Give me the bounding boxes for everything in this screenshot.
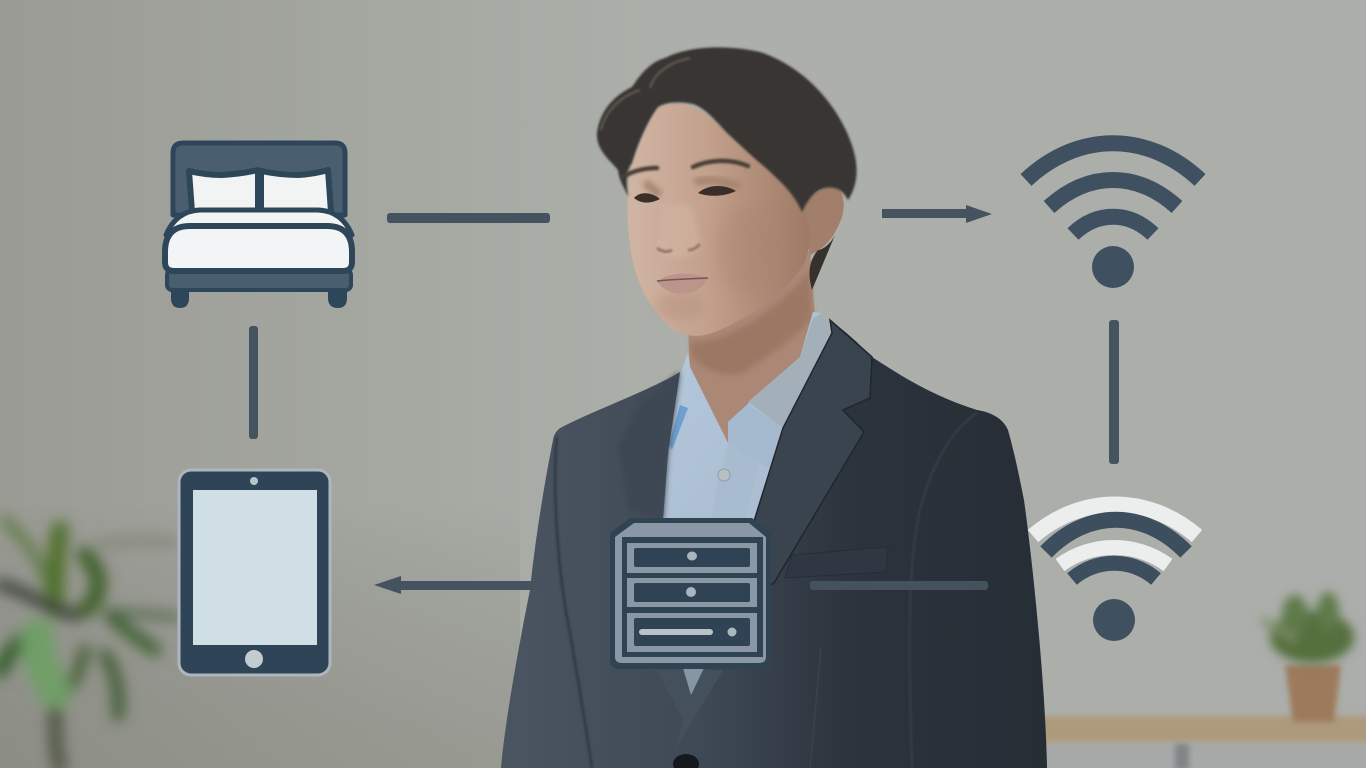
mattress <box>165 226 352 271</box>
home button <box>245 650 263 668</box>
eyes <box>634 186 736 203</box>
collar inner fold <box>728 404 783 470</box>
legs <box>171 285 347 308</box>
shirt placket <box>712 440 765 520</box>
screen <box>193 490 317 645</box>
base <box>167 270 351 290</box>
connector: wifi to lower wifi <box>1109 320 1119 464</box>
facial shading <box>645 180 784 320</box>
icon: server <box>610 518 771 669</box>
pillows <box>189 170 258 212</box>
arrow: server to tablet <box>374 576 543 594</box>
collar left shadow <box>669 405 688 450</box>
headboard <box>173 143 345 215</box>
neck <box>688 250 815 443</box>
button <box>673 754 699 768</box>
icon: bed <box>165 143 352 308</box>
shirt below server <box>683 668 704 695</box>
blurred plant, left <box>0 520 178 768</box>
sleeve seam left <box>555 437 592 768</box>
icon: tablet <box>179 470 330 675</box>
connector: tablet to bed <box>249 326 258 439</box>
shelf with potted plant, right <box>1040 592 1366 768</box>
ear <box>800 187 844 255</box>
hair highlights <box>601 58 690 130</box>
mouth <box>657 274 708 294</box>
person <box>501 47 1047 768</box>
front seam <box>810 647 821 768</box>
icon: wifi lower <box>1033 504 1197 641</box>
camera <box>250 477 258 485</box>
nostrils <box>657 244 700 252</box>
arrow: to wifi <box>882 205 992 223</box>
back hair <box>810 235 835 290</box>
pocket <box>785 547 888 578</box>
connector: bed to wifi <box>387 213 550 223</box>
shirt button <box>718 469 730 481</box>
connector: lower wifi to server <box>810 581 988 590</box>
face <box>628 104 810 336</box>
sheet <box>166 210 352 235</box>
collar right <box>748 313 832 428</box>
icon: wifi upper <box>1026 143 1200 288</box>
lower lapels <box>657 670 723 750</box>
right lapel <box>740 320 872 600</box>
suit jacket <box>501 320 1047 768</box>
hair <box>597 47 857 212</box>
shirt <box>660 312 832 520</box>
eyebrows <box>623 161 748 177</box>
neck shading <box>690 270 812 375</box>
left lapel <box>618 372 680 520</box>
sleeve seam right <box>910 413 977 768</box>
